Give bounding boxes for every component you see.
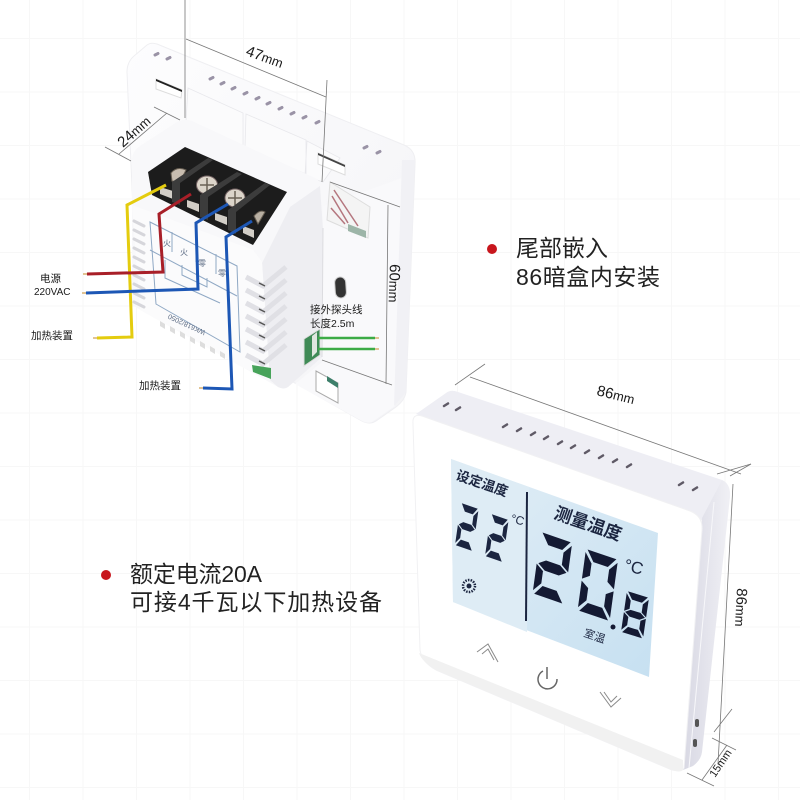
measured temperature label: 测量温度 bbox=[552, 503, 624, 545]
terminal module body bbox=[132, 120, 323, 388]
label: heating device left: 加热装置 bbox=[31, 329, 73, 342]
module side face bbox=[262, 186, 323, 388]
label: external probe: 长度2.5m bbox=[310, 317, 355, 330]
dimension: top 86mm: 86mm bbox=[595, 382, 636, 408]
measured temperature digits bbox=[533, 532, 649, 639]
callout: rated current bbox=[101, 561, 382, 615]
dimension: 24mm bbox=[105, 107, 180, 161]
set temperature unit: °C bbox=[509, 511, 526, 528]
set temperature digits bbox=[455, 503, 509, 562]
label: heating device bottom: 加热装置 bbox=[139, 379, 181, 392]
module side vents bbox=[246, 267, 286, 364]
dimension: 47mm: 47mm bbox=[244, 43, 285, 72]
wire: red power lead bbox=[83, 194, 191, 274]
rear view of thermostat: WK618/2050 bbox=[167, 312, 207, 336]
right side face bbox=[683, 480, 730, 770]
dimension: right 86mm: 86 mm bbox=[731, 588, 750, 627]
bottom bevel bbox=[419, 653, 683, 772]
rear view of thermostat: 火 bbox=[180, 248, 188, 257]
dimension: 47mm bbox=[185, 0, 327, 182]
LCD screen bbox=[451, 459, 658, 677]
label: power bbox=[34, 272, 71, 298]
front view of thermostat bbox=[413, 391, 730, 772]
plate slots bbox=[156, 79, 182, 98]
callout: embedded installation: 86暗盒内安装 bbox=[516, 264, 660, 290]
plate lower right section bbox=[295, 178, 402, 423]
front face bbox=[413, 415, 702, 771]
rear view of thermostat: 零 bbox=[198, 259, 206, 268]
callout: embedded installation: 尾部嵌入 bbox=[516, 235, 608, 261]
down button bbox=[600, 692, 621, 707]
terminal contacts bbox=[160, 187, 254, 238]
module vent shadows bbox=[259, 283, 265, 364]
dimension: 60mm: 60 mm bbox=[385, 264, 403, 303]
side holes bbox=[695, 719, 699, 727]
terminal dividers bbox=[172, 158, 270, 234]
lower slot bbox=[316, 371, 338, 403]
terminal screws bbox=[171, 169, 186, 182]
module front face bbox=[132, 205, 270, 380]
room temperature label: 室温 bbox=[582, 626, 607, 646]
sun icon bbox=[463, 580, 475, 592]
up button bbox=[477, 644, 498, 662]
wiring window bbox=[327, 182, 370, 238]
wires: green probe leads bbox=[318, 338, 379, 349]
callout: rated current: 额定电流20A bbox=[130, 561, 263, 587]
label: external probe bbox=[310, 303, 363, 330]
wire: blue power lead bbox=[82, 204, 228, 293]
mounting hole bbox=[334, 277, 347, 298]
wire: yellow heating lead bbox=[93, 185, 166, 338]
dimension: 15mm: 15mm bbox=[708, 748, 735, 780]
rear view of thermostat: 零 bbox=[218, 269, 226, 278]
rear view of thermostat bbox=[127, 43, 415, 423]
label: power: 电源 bbox=[40, 272, 61, 285]
callout: rated current: 可接4千瓦以下加热设备 bbox=[130, 589, 382, 615]
power button bbox=[538, 667, 557, 689]
plate vents bbox=[155, 54, 380, 153]
dimension: 15mm bbox=[687, 738, 736, 786]
wiring diagram label bbox=[150, 222, 240, 352]
dimension: 24mm: 24mm bbox=[114, 113, 154, 151]
measured temperature unit: °C bbox=[622, 556, 645, 579]
label: external probe: 接外探头线 bbox=[310, 303, 363, 316]
LCD divider bbox=[526, 492, 527, 621]
label: power: 220VAC bbox=[34, 287, 71, 298]
black terminal block bbox=[148, 147, 287, 245]
wire: blue heating lead bbox=[199, 221, 252, 389]
mounting plate bbox=[127, 43, 415, 423]
green connector bbox=[252, 365, 271, 379]
set temperature label: 设定温度 bbox=[454, 467, 511, 500]
plate clips bbox=[186, 88, 340, 182]
rear view of thermostat: 火 bbox=[163, 239, 171, 248]
module front vents bbox=[134, 221, 144, 307]
dimension: right 86mm bbox=[714, 464, 751, 764]
dimension: 60mm bbox=[322, 182, 403, 385]
callout: embedded installation bbox=[487, 235, 660, 290]
dimension: top 86mm bbox=[455, 364, 751, 474]
bottom tabs bbox=[160, 321, 225, 359]
top vents bbox=[444, 404, 697, 490]
top face bbox=[416, 391, 728, 520]
